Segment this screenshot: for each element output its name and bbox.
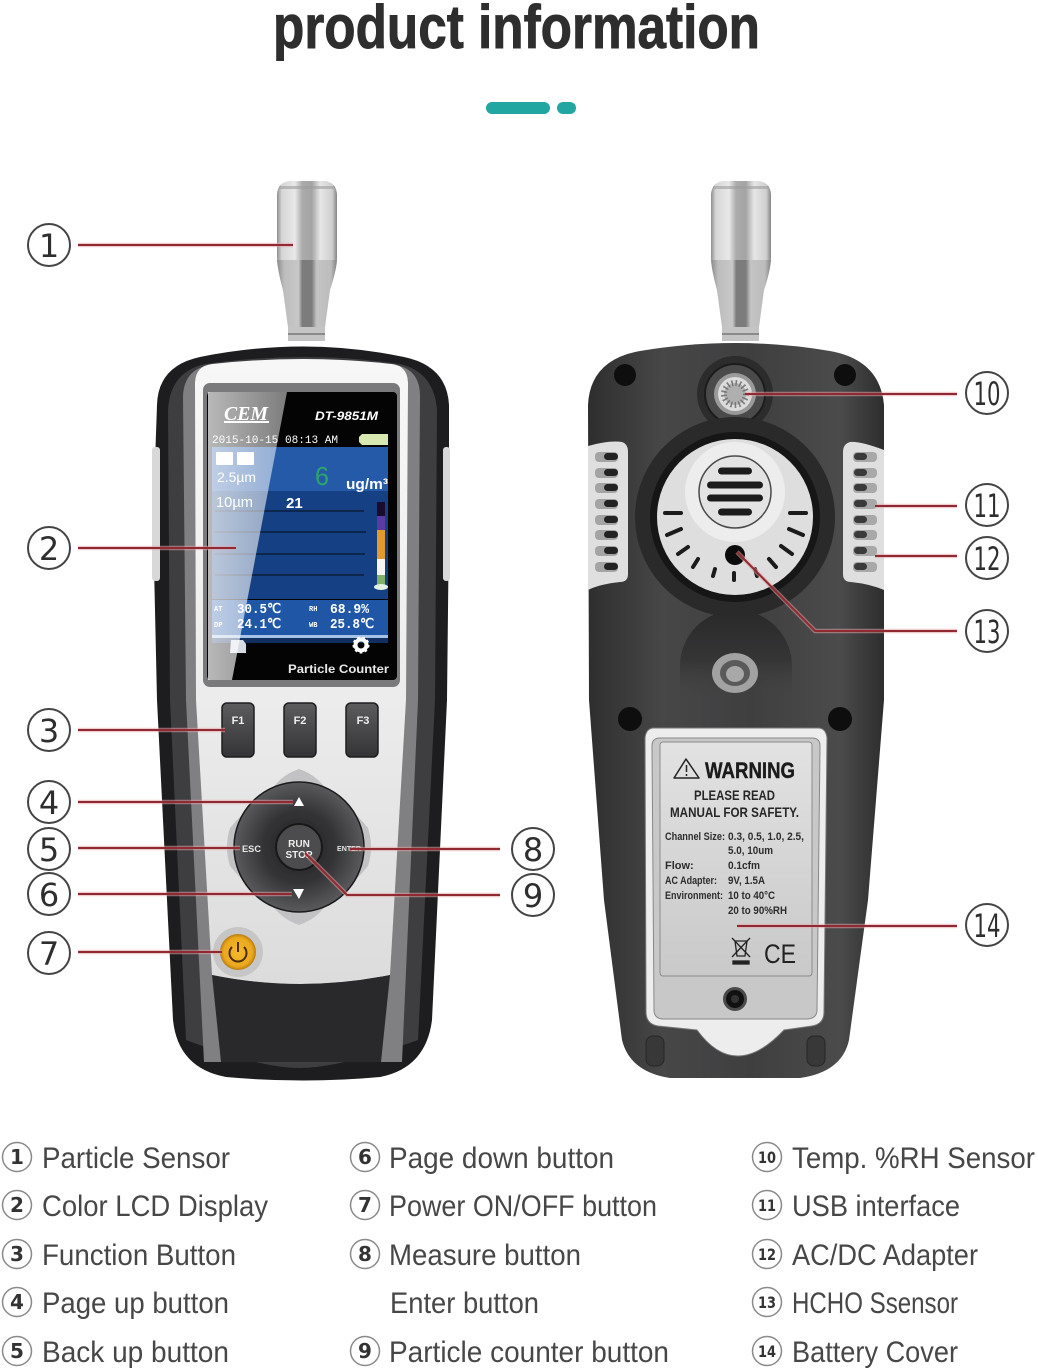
PM2.5 label: 2.5µm bbox=[217, 469, 256, 485]
specifications bbox=[665, 831, 804, 917]
callout 1: 1 bbox=[39, 227, 59, 265]
callout 7 bbox=[28, 932, 70, 974]
warning label bbox=[660, 742, 812, 976]
speaker ring bbox=[699, 456, 771, 528]
callout 12 bbox=[966, 537, 1008, 579]
PM10 label: 10µm bbox=[216, 494, 253, 511]
legend item 9: 9 bbox=[358, 1339, 372, 1363]
warning text: PLEASE READ bbox=[694, 787, 775, 803]
navigation pad bbox=[227, 769, 371, 925]
callout 11 bbox=[966, 484, 1008, 526]
readouts: 24.1℃ bbox=[237, 617, 281, 633]
legend item 13: HCHO Ssensor bbox=[792, 1287, 958, 1320]
legend item 2: Color LCD Display bbox=[42, 1190, 268, 1223]
F3 key: F3 bbox=[357, 715, 369, 727]
chart grid lines bbox=[215, 511, 366, 575]
HCHO sensor housing bbox=[635, 417, 835, 617]
battery icon bbox=[359, 434, 388, 445]
icon: particle sensor probe (back) bbox=[711, 181, 771, 341]
brand logo: CEM bbox=[224, 403, 269, 425]
callout 13: 13 bbox=[974, 613, 1000, 651]
callout 4 bbox=[28, 781, 70, 823]
callout 10 bbox=[966, 372, 1008, 414]
lower blue chart area bbox=[212, 491, 388, 599]
F1 key: F1 bbox=[232, 715, 244, 727]
legend item 7: Power ON/OFF button bbox=[389, 1190, 657, 1223]
right vent grille bbox=[843, 442, 884, 590]
callout 3: 3 bbox=[39, 712, 59, 750]
callout 9: 9 bbox=[523, 877, 543, 915]
callout 5 bbox=[28, 828, 70, 870]
callout lines: back bbox=[737, 394, 957, 926]
legend column 2 bbox=[350, 1142, 669, 1369]
white face bbox=[195, 359, 408, 984]
CE mark: CE bbox=[764, 939, 796, 969]
fade under readout band bbox=[212, 638, 388, 643]
side grip left bbox=[152, 447, 160, 581]
legend item 4: 4 bbox=[10, 1290, 24, 1314]
legend item 5: 5 bbox=[10, 1339, 24, 1363]
legend item 1: 1 bbox=[10, 1145, 24, 1169]
side grip right bbox=[443, 447, 450, 581]
function keys bbox=[222, 703, 378, 757]
legend item 8: Measure button bbox=[389, 1239, 581, 1272]
legend item 3: 3 bbox=[10, 1242, 24, 1266]
callout 6 bbox=[28, 873, 70, 915]
body bezel dark band bbox=[168, 357, 437, 1068]
warning text bbox=[670, 787, 799, 820]
screen glare bbox=[208, 392, 287, 680]
ESC key label: ESC bbox=[242, 844, 261, 855]
up arrow bbox=[294, 797, 304, 806]
legend item 7: 7 bbox=[358, 1193, 372, 1217]
legend item 12: AC/DC Adapter bbox=[792, 1239, 978, 1272]
callout 5: 5 bbox=[39, 831, 59, 869]
power button cap bbox=[220, 934, 256, 970]
legend item 12: 12 bbox=[758, 1245, 776, 1264]
specifications: 20 to 90%RH bbox=[728, 905, 787, 917]
F3 key bbox=[346, 703, 378, 757]
center key bbox=[276, 824, 322, 870]
legend item 8 bbox=[350, 1239, 581, 1320]
specifications: 9V, 1.5A bbox=[728, 875, 765, 887]
legend item 9: Particle counter button bbox=[389, 1336, 669, 1369]
center screw recess bbox=[680, 610, 792, 700]
body bezel grey band bbox=[183, 360, 420, 1062]
callout 3 bbox=[28, 709, 70, 751]
F1 key bbox=[222, 703, 254, 757]
pad disc bbox=[234, 782, 364, 912]
legend item 10: 10 bbox=[758, 1148, 776, 1167]
pad shadow bbox=[227, 769, 371, 925]
specifications: AC Adapter: bbox=[665, 875, 717, 887]
callout 6: 6 bbox=[39, 876, 59, 914]
callout 8 bbox=[512, 828, 554, 870]
readout separator bbox=[212, 635, 388, 638]
mode label: Particle Counter bbox=[288, 662, 389, 676]
center ring bbox=[271, 819, 327, 875]
legend item 14: 14 bbox=[758, 1342, 776, 1361]
callout 7: 7 bbox=[39, 935, 59, 973]
top screws bbox=[614, 364, 856, 386]
readouts: 30.5℃ bbox=[237, 602, 281, 618]
readouts: RH bbox=[309, 606, 317, 614]
icon: WEEE bin bbox=[732, 938, 750, 964]
radial vent slots bbox=[665, 513, 806, 580]
legend item 4: Page up button bbox=[42, 1287, 229, 1320]
warning text: MANUAL FOR SAFETY. bbox=[670, 804, 799, 820]
F2 key bbox=[284, 703, 316, 757]
device back body bbox=[588, 343, 884, 1078]
readouts: AT bbox=[214, 606, 222, 614]
callout 12: 12 bbox=[974, 540, 1000, 578]
readouts: 68.9% bbox=[330, 602, 370, 618]
callout 13 bbox=[966, 610, 1008, 652]
cover outer bbox=[645, 728, 827, 1056]
specifications: Environment: bbox=[665, 890, 723, 902]
legend item 1: Particle Sensor bbox=[42, 1142, 230, 1175]
panel: device front bbox=[152, 181, 450, 1080]
readouts: DP bbox=[214, 622, 222, 630]
bottom feet bbox=[646, 1036, 825, 1066]
RUN STOP label bbox=[285, 839, 313, 861]
legend item 11: USB interface bbox=[792, 1190, 960, 1223]
readouts: WB bbox=[309, 622, 318, 630]
screen bezel bbox=[203, 383, 400, 687]
legend item 8: Enter button bbox=[390, 1287, 539, 1320]
power button bbox=[213, 927, 263, 977]
legend item 5: Back up button bbox=[42, 1336, 229, 1369]
screen glass bbox=[207, 392, 397, 680]
legend item 8: 8 bbox=[358, 1242, 372, 1266]
model number: DT-9851M bbox=[315, 409, 379, 423]
mode tabs bbox=[216, 452, 254, 465]
callout 14: 14 bbox=[974, 907, 1000, 945]
speaker slots bbox=[707, 468, 763, 516]
air quality colour scale bbox=[374, 502, 388, 590]
PM2.5 value: 6 bbox=[315, 461, 329, 491]
bottom blue readout band bbox=[212, 600, 388, 635]
specifications: 0.1cfm bbox=[728, 860, 760, 872]
icon: save bbox=[230, 640, 246, 653]
icon: power symbol bbox=[230, 942, 246, 962]
legend column 3 bbox=[752, 1142, 1035, 1369]
specifications: Flow: bbox=[665, 860, 694, 872]
panel: LCD screen bbox=[203, 383, 400, 687]
teal accent bars bbox=[486, 102, 576, 114]
down arrow bbox=[293, 889, 304, 899]
callout 4: 4 bbox=[39, 784, 59, 822]
RUN STOP label: STOP bbox=[285, 850, 313, 861]
legend item 14: Battery Cover bbox=[792, 1336, 958, 1369]
icon: particle sensor probe (front) bbox=[277, 181, 337, 341]
cover screw bbox=[723, 987, 747, 1011]
cover inner bbox=[652, 738, 820, 1019]
RUN STOP label: RUN bbox=[288, 839, 310, 850]
power button recess bbox=[213, 927, 263, 977]
callout 9 bbox=[512, 874, 554, 916]
specifications: 10 to 40°C bbox=[728, 890, 775, 902]
unit label: ug/m³ bbox=[346, 476, 388, 493]
callout 11: 11 bbox=[974, 487, 1000, 525]
callout 8: 8 bbox=[523, 831, 543, 869]
legend item 3: Function Button bbox=[42, 1239, 236, 1272]
PM10 value: 21 bbox=[286, 495, 303, 512]
legend item 13 bbox=[752, 1287, 958, 1320]
legend item 13: 13 bbox=[758, 1293, 776, 1312]
upper blue band bbox=[212, 447, 388, 491]
specifications: 0.3, 0.5, 1.0, 2.5, bbox=[728, 831, 804, 843]
lower screws bbox=[618, 707, 852, 731]
HCHO sensor hole bbox=[725, 545, 745, 565]
ENTER key label: ENTER bbox=[337, 844, 362, 853]
legend item 6: 6 bbox=[358, 1145, 372, 1169]
temperature and humidity sensor bbox=[697, 356, 773, 432]
speaker disc bbox=[685, 442, 785, 542]
icon: warning triangle bbox=[674, 759, 699, 778]
panel: device back bbox=[588, 181, 884, 1078]
callout 1 bbox=[28, 224, 70, 266]
callout 10: 10 bbox=[974, 375, 1000, 413]
device front body bbox=[153, 346, 449, 1080]
legend item 2: 2 bbox=[10, 1193, 24, 1217]
logo underline bbox=[224, 421, 269, 423]
callout 14 bbox=[966, 904, 1008, 946]
specifications: 5.0, 10um bbox=[728, 845, 773, 857]
legend item 11: 11 bbox=[758, 1196, 776, 1215]
warning heading: WARNING bbox=[705, 758, 795, 783]
panel: battery cover bbox=[645, 728, 827, 1056]
readouts bbox=[214, 602, 374, 633]
icon: settings gear bbox=[354, 638, 368, 652]
legend column 1 bbox=[2, 1142, 268, 1369]
F2 key: F2 bbox=[294, 715, 306, 727]
black lower panel bbox=[212, 975, 390, 1062]
specifications: Channel Size: bbox=[665, 831, 725, 843]
readouts: 25.8℃ bbox=[330, 617, 374, 633]
callout lines: front bbox=[78, 245, 500, 952]
legend item 6: Page down button bbox=[389, 1142, 614, 1175]
callout 2: 2 bbox=[39, 530, 59, 568]
callout 2 bbox=[28, 527, 70, 569]
left vent grille bbox=[588, 442, 628, 590]
date and time: 2015-10-15 08:13 AM bbox=[212, 435, 338, 447]
